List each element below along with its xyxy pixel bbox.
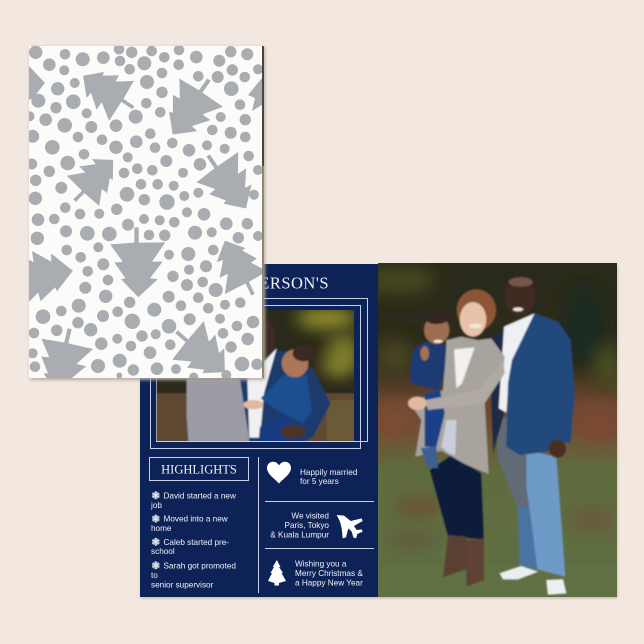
text: wishes: a Happy New Year <box>295 579 363 588</box>
bullet text: Moved: Moved into a new <box>164 515 228 524</box>
silver foil pattern <box>29 46 262 378</box>
icon: christmas tree <box>268 560 286 586</box>
text: travel: & Kuala Lumpur <box>270 531 329 540</box>
main family photo <box>378 263 617 597</box>
panel: back card navy <box>140 264 617 598</box>
photo frame outer <box>150 298 368 448</box>
icon: snowflake <box>152 515 160 523</box>
text: wishes: Wishing you a <box>295 560 347 569</box>
bullet text: David: David started a new <box>164 491 236 500</box>
man <box>491 276 575 595</box>
woman <box>408 289 505 587</box>
inset family photo <box>153 307 360 444</box>
panel: front card with silver foil pattern <box>28 45 268 382</box>
highlights list <box>150 491 236 589</box>
bullet text: Sarah: senior supervisor <box>151 580 214 589</box>
highlights heading: HIGHLIGHTS <box>161 462 237 476</box>
bullet text: David: job <box>150 501 162 510</box>
icon: snowflake <box>152 561 160 569</box>
silver dots <box>24 44 263 382</box>
bullet text: Moved: home <box>151 524 172 533</box>
icon: snowflake <box>152 538 160 546</box>
highlights heading <box>150 458 248 480</box>
icon: heart <box>267 462 291 484</box>
bullet text: Sarah: to <box>151 571 158 580</box>
icon: snowflake <box>152 491 160 499</box>
silver trees <box>29 66 262 378</box>
bullet text: Caleb: Caleb started pre- <box>164 538 229 547</box>
text: married: for 5 years <box>300 477 339 486</box>
text: travel: Paris, Tokyo <box>285 521 329 530</box>
bullet text: Sarah: Sarah got promoted <box>164 561 236 570</box>
icon: airplane <box>337 515 363 538</box>
bullet text: Caleb: school <box>151 547 175 556</box>
text: wishes: Merry Christmas & <box>295 569 363 578</box>
text: travel: We visited <box>291 511 329 520</box>
title: THE ANDERSON'S <box>185 274 329 292</box>
child <box>408 311 505 468</box>
text: married: Happily married <box>300 468 358 477</box>
